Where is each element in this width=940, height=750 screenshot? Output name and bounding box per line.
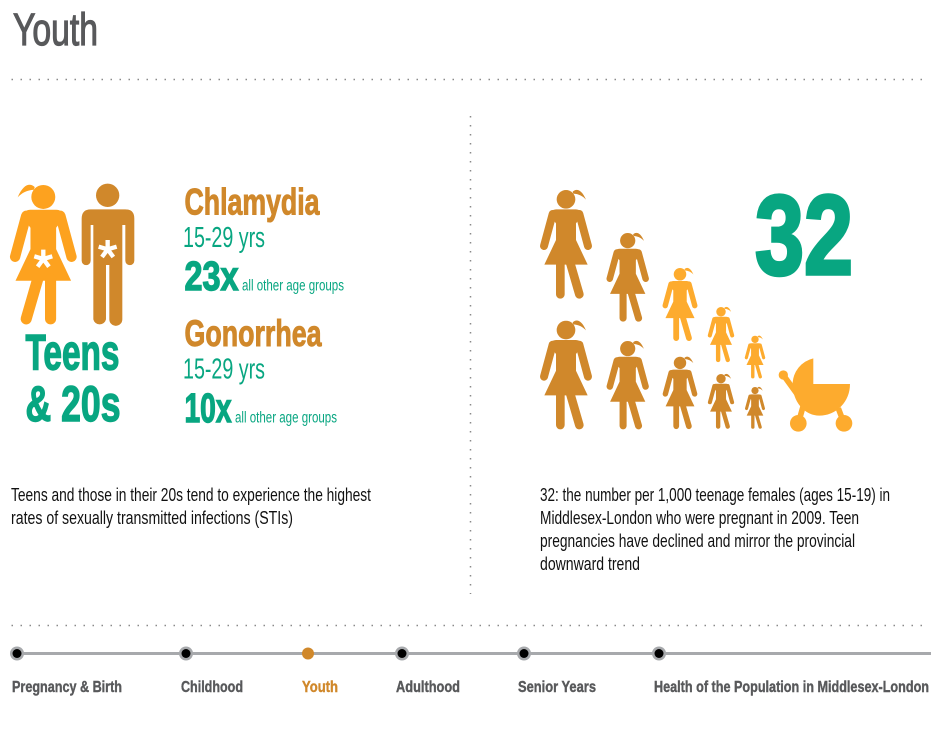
- text block: STI description: Teens and those in their 20s tend to experience the highest: [11, 485, 371, 505]
- stat: gonorrhea: [183, 313, 337, 431]
- stat: chlamydia: 15-29 yrs: [183, 222, 265, 254]
- icon: male figure with asterisk: [82, 184, 134, 326]
- stat: chlamydia: [183, 182, 344, 299]
- label: senior years: Senior Years: [518, 679, 596, 696]
- label: childhood: Childhood: [181, 679, 243, 696]
- panel: teen pregnancy: [540, 172, 890, 574]
- label: adulthood: Adulthood: [396, 679, 460, 696]
- text block: pregnancy description: [540, 485, 890, 574]
- text block: pregnancy description: downward trend: [540, 554, 640, 574]
- icon: baby stroller: [779, 358, 852, 432]
- text block: pregnancy description: pregnancies have declined and mirror the provincial: [540, 531, 855, 551]
- stat: gonorrhea: Gonorrhea: [184, 313, 322, 354]
- stat: gonorrhea: all other age groups: [235, 410, 337, 426]
- text block: STI description: [11, 485, 371, 528]
- label: youth: Youth: [302, 679, 338, 696]
- heading: teens and 20s: & 20s: [26, 376, 120, 432]
- node: senior years: [517, 646, 531, 660]
- stat: chlamydia: Chlamydia: [184, 182, 320, 222]
- stat: chlamydia: 23x: [184, 253, 239, 299]
- node: health of the population: [652, 646, 666, 660]
- node: childhood: [179, 646, 193, 660]
- node: adulthood: [395, 646, 409, 660]
- title: Youth: [13, 4, 98, 55]
- icon: female figure with asterisk: [15, 185, 72, 319]
- text block: STI description: rates of sexually transmitted infections (STIs): [11, 508, 293, 528]
- node: pregnancy and birth: [10, 646, 24, 660]
- stat: gonorrhea: 15-29 yrs: [183, 354, 265, 386]
- stat: chlamydia: all other age groups: [242, 278, 344, 294]
- icon row: bottom row of girls: [544, 321, 763, 427]
- heading: teens and 20s: [26, 324, 120, 432]
- panel: sexually transmitted infections: [11, 182, 371, 528]
- heading: teens and 20s: Teens: [26, 324, 120, 380]
- navigation timeline: [10, 646, 931, 696]
- node: youth: [302, 648, 314, 660]
- label: pregnancy and birth: Pregnancy & Birth: [12, 679, 122, 696]
- icon row: top row of girls: [544, 190, 764, 377]
- stat: gonorrhea: 10x: [184, 385, 232, 431]
- big number 32: 32: [755, 172, 853, 298]
